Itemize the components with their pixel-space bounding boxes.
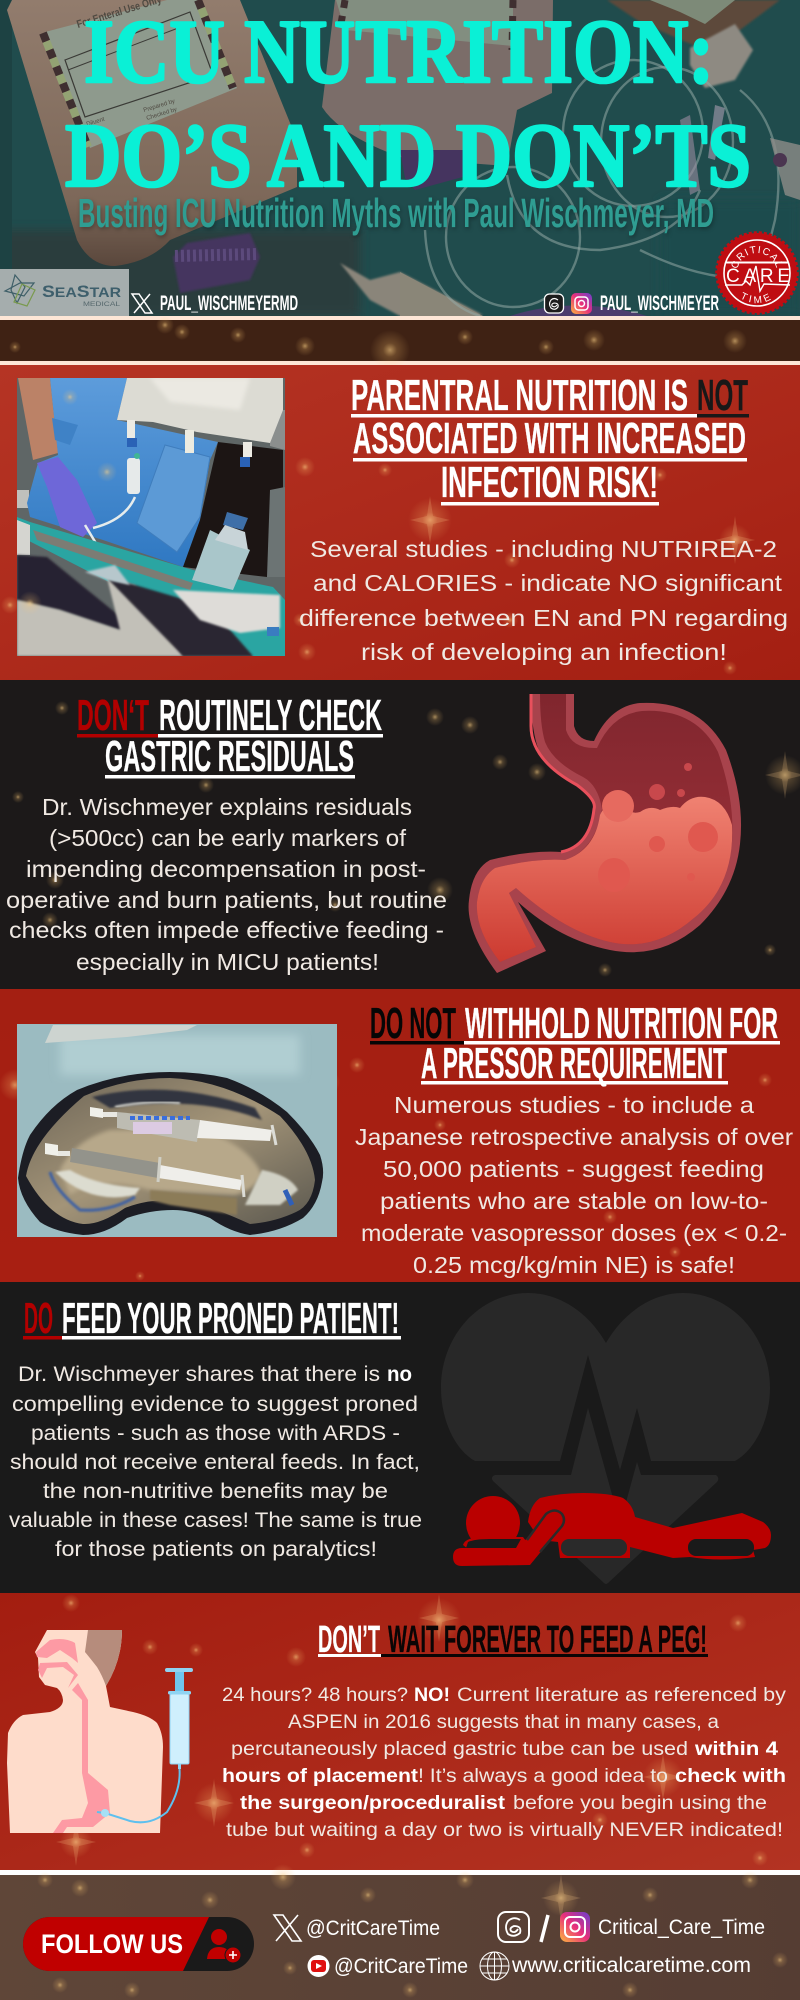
body text: tube but waiting a day or two is virtually NEVER indicated! (226, 1820, 783, 1841)
body text: hours of placement (222, 1766, 419, 1787)
body text (6, 794, 447, 975)
body text: Japanese retrospective analysis of over (355, 1124, 793, 1150)
body text: for those patients on paralytics! (55, 1538, 377, 1561)
body text: compelling evidence to suggest proned (12, 1393, 418, 1416)
body text: the non-nutritive benefits may be (43, 1480, 388, 1503)
social: X @CritCareTime: @CritCareTime (306, 1917, 440, 1940)
badge: Critical Care Time (715, 231, 799, 315)
badge: Critical Care Time: CARE (726, 266, 790, 287)
panel: proned patient (0, 1282, 800, 1593)
body text: the surgeon/proceduralist (240, 1793, 506, 1814)
background photo: enteral feeding bottles and tubing (0, 0, 800, 316)
icon: stomach illustration (469, 694, 741, 973)
social: website: www.criticalcaretime.com (511, 1954, 751, 1977)
body text: patients who are stable on low-to- (380, 1188, 768, 1214)
body text: 50,000 patients - suggest feeding (383, 1156, 764, 1182)
body text (222, 1685, 787, 1841)
heading (23, 1294, 401, 1343)
logo: SeaStar Medical: SEASTAR (42, 282, 121, 301)
social: YouTube @CritCareTime: @CritCareTime (334, 1955, 468, 1978)
body text: operative and burn patients, but routine (6, 887, 447, 913)
body text: Current literature as referenced by (457, 1685, 787, 1706)
heading: ROUTINELY CHECK (159, 691, 382, 740)
syringe: upper (90, 1107, 276, 1145)
social: Threads and Instagram Critical_Care_Time (498, 1912, 765, 1942)
body text: risk of developing an infection! (361, 639, 727, 665)
body text: ! It’s always a good idea to (418, 1766, 668, 1787)
body text: 0.25 mcg/kg/min NE) is safe! (413, 1252, 735, 1278)
logo: SeaStar Medical: MEDICAL (83, 302, 121, 308)
body text: no (387, 1363, 412, 1386)
body text: impending decompensation in post- (26, 856, 426, 882)
heading (77, 691, 383, 781)
syringe: lower (45, 1143, 244, 1197)
social handle: Threads and Instagram Paul_Wischmeyer (544, 292, 719, 315)
heading: FEED YOUR PRONED PATIENT! (62, 1294, 399, 1343)
photo label text: Prepared by (143, 99, 176, 114)
heading (351, 371, 749, 507)
photo label text: Checked by (146, 107, 178, 122)
body text: checks often impede effective feeding - (9, 917, 444, 943)
body text: before you begin using the (513, 1793, 767, 1814)
heading: DO (24, 1294, 53, 1343)
icon: heart with ECG and proned patient (441, 1293, 771, 1584)
body text: patients - such as those with ARDS - (31, 1422, 400, 1445)
panel: footer with social links (0, 1864, 800, 2000)
social: X @CritCareTime (274, 1915, 440, 1941)
body text: Numerous studies - to include a (394, 1092, 754, 1118)
photo: kidney dish with two syringes (17, 1024, 337, 1237)
photo: gloved hand with parenteral nutrition bag (17, 378, 285, 656)
heading (370, 999, 780, 1088)
body text: Dr. Wischmeyer explains residuals (42, 794, 412, 820)
body text: should not receive enteral feeds. In fact, (10, 1451, 420, 1474)
body text: difference between EN and PN regarding (299, 605, 788, 631)
panel: gastric residuals (0, 680, 800, 989)
heading: INFECTION RISK! (441, 458, 658, 507)
social handle: X Paul_WischmeyerMD: PAUL_WISCHMEYERMD (160, 292, 298, 315)
body text (9, 1363, 422, 1561)
photo label text (75, 0, 178, 128)
body text: especially in MICU patients! (76, 949, 379, 975)
icon: torso with PEG feeding tube and syringe (7, 1630, 193, 1833)
panel: parenteral nutrition (0, 365, 800, 680)
heading: DO NOT (370, 999, 456, 1048)
panel: header banner with title over feeding-bottle photo (0, 0, 800, 316)
social handle: X Paul_WischmeyerMD (132, 292, 298, 315)
photo label text: Diluent (86, 117, 106, 128)
body text: NO! (414, 1685, 450, 1706)
logo: SeaStar Medical (0, 269, 129, 316)
panel: brown divider band with sparkles (0, 316, 800, 370)
panel: pressor requirement (0, 989, 800, 1282)
body text: percutaneously placed gastric tube can be used (231, 1739, 688, 1760)
badge: Critical Care Time: CRITICAL (732, 246, 782, 268)
button: follow us: FOLLOW US (41, 1929, 183, 1959)
social: Threads and Instagram Critical_Care_Time: Critical_Care_Time (598, 1916, 765, 1939)
heading: DON‘T (77, 691, 149, 740)
heading: GASTRIC RESIDUALS (105, 732, 354, 781)
body text: 24 hours? 48 hours? (222, 1685, 408, 1706)
button: follow us (23, 1917, 254, 1971)
body text (299, 536, 788, 665)
body text: check with (675, 1766, 786, 1787)
panel: feeding a PEG (0, 1593, 800, 1870)
heading: NOT (697, 371, 748, 420)
body text: (>500cc) can be early markers of (49, 825, 407, 851)
body text: within 4 (694, 1739, 778, 1760)
body text: valuable in these cases! The same is true (9, 1509, 422, 1532)
heading (318, 1619, 708, 1661)
body text: ASPEN in 2016 suggests that in many cases, a (288, 1712, 719, 1733)
body text: and CALORIES - indicate NO significant (313, 570, 783, 596)
title (65, 1, 751, 206)
body text: Dr. Wischmeyer shares that there is (18, 1363, 380, 1386)
badge: Critical Care Time: TIME (742, 292, 771, 304)
body text: moderate vasopressor doses (ex < 0.2- (361, 1220, 787, 1246)
body text (355, 1092, 793, 1278)
heading: DON’T (318, 1619, 380, 1661)
body text: Several studies - including NUTRIREA-2 (310, 536, 777, 562)
